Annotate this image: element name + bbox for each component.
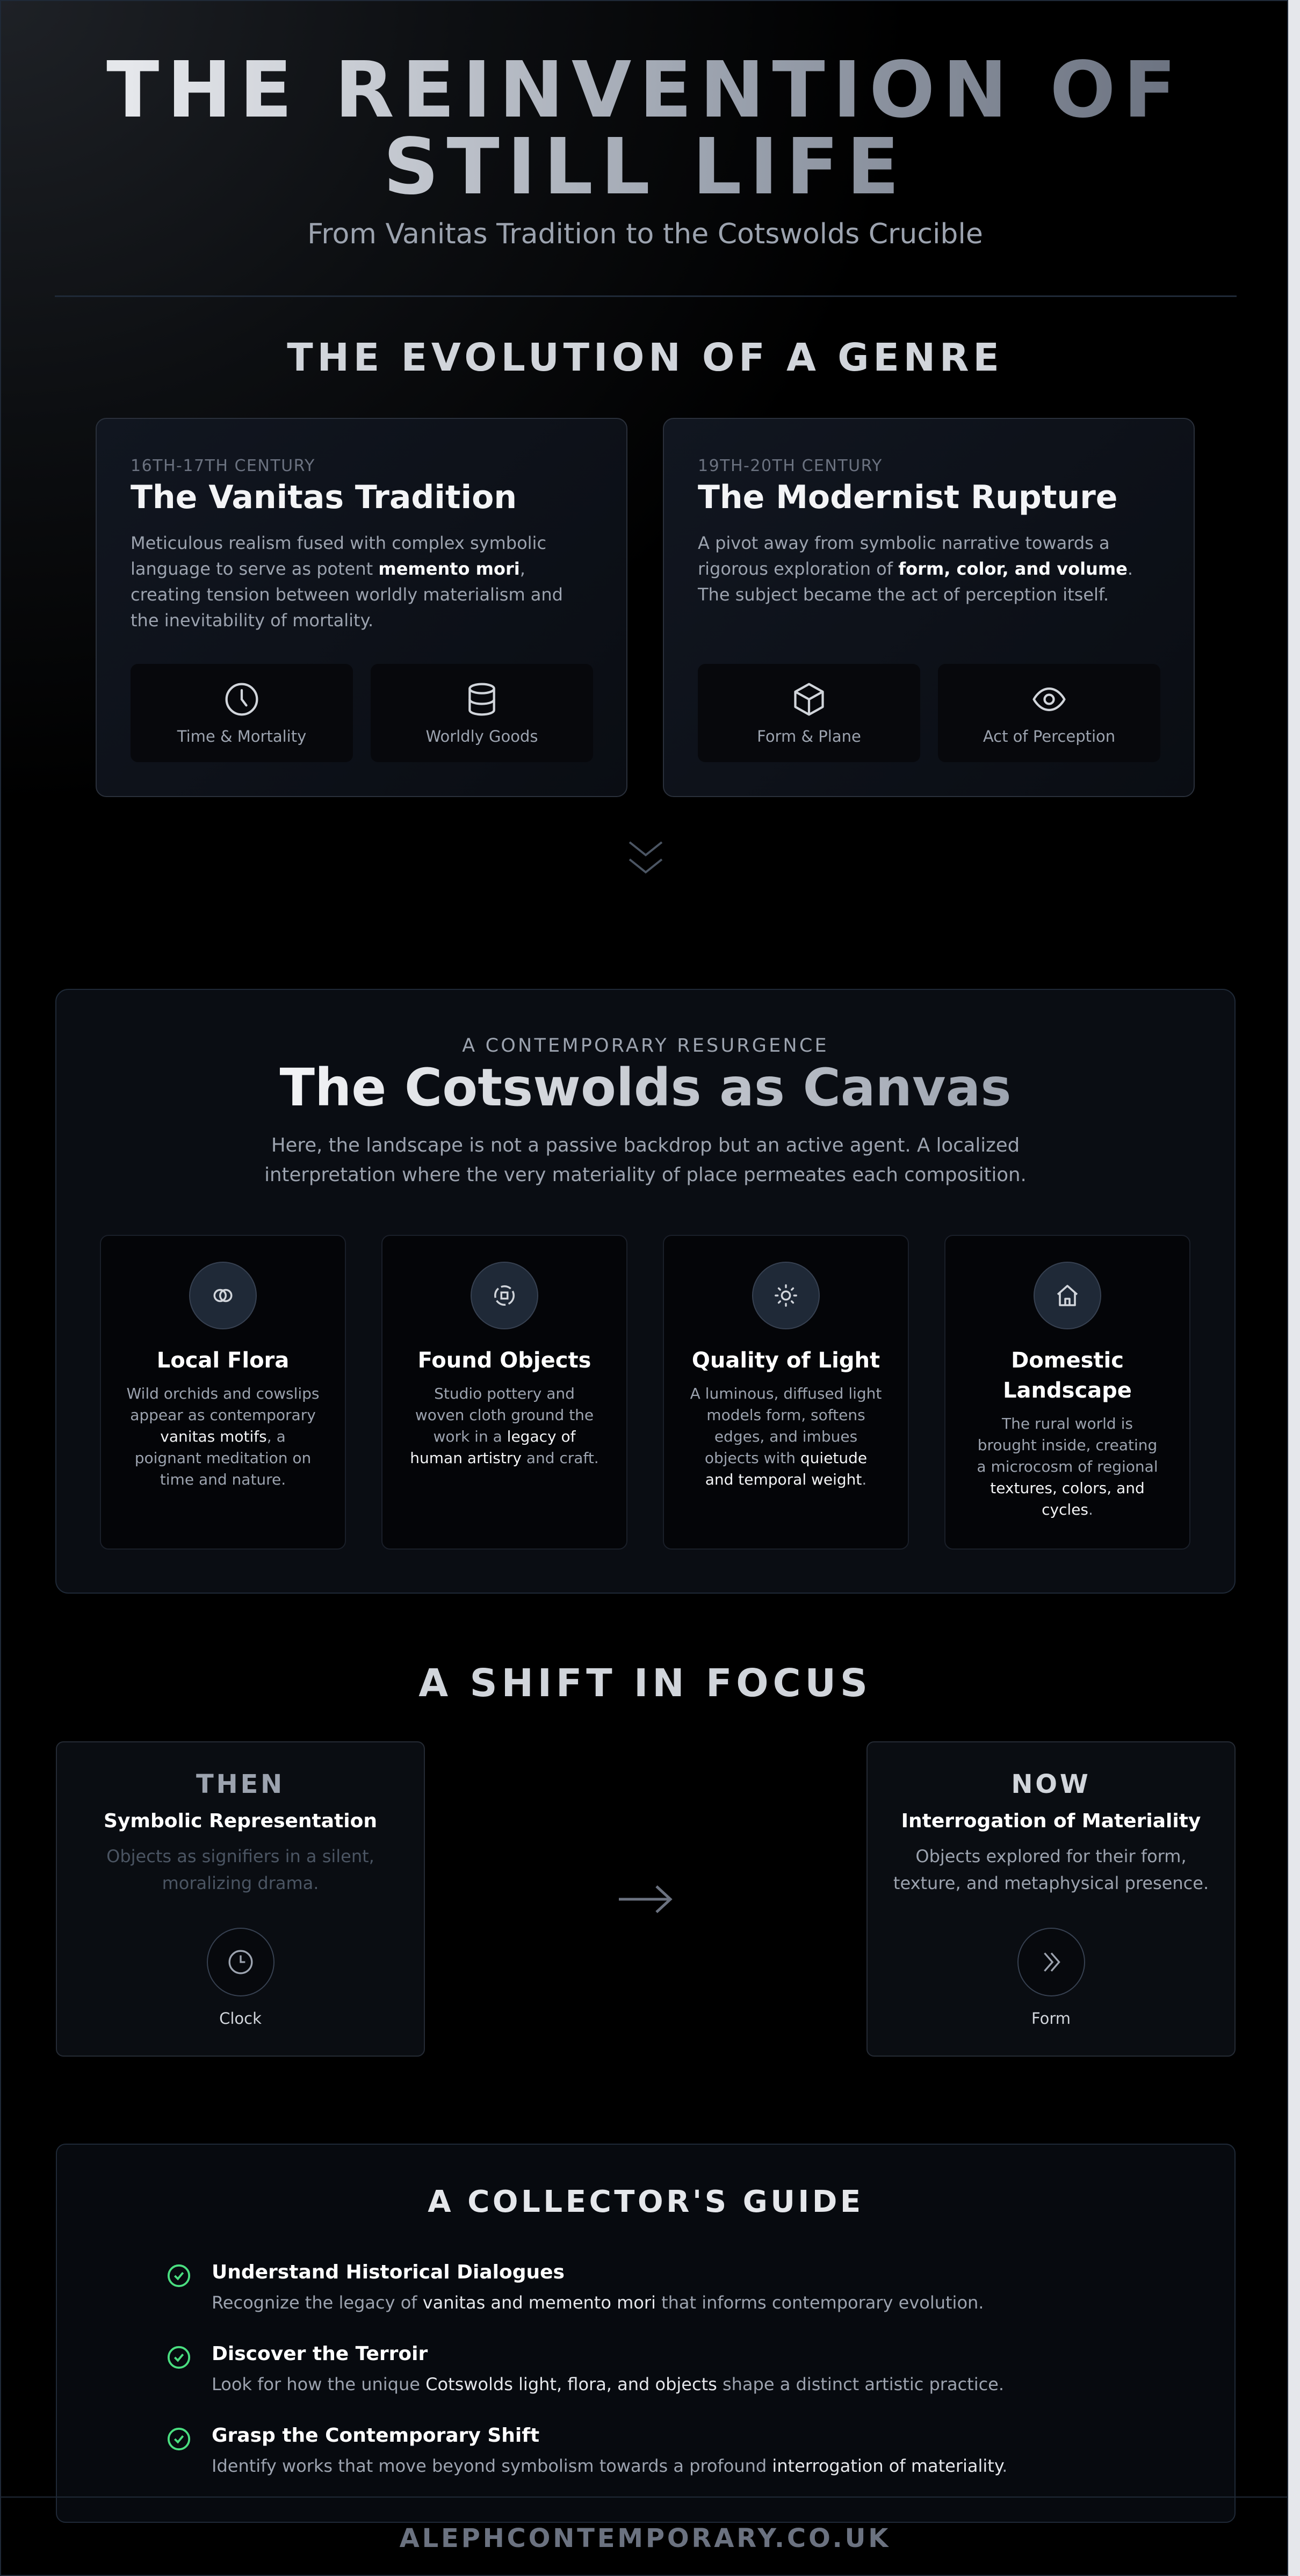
label: THEN <box>196 1769 285 1799</box>
description: language to serve as potent memento mori, <box>131 559 525 579</box>
icon: clock <box>206 1928 274 1996</box>
icon tiles <box>698 664 1160 762</box>
heading: A COLLECTOR'S GUIDE <box>428 2184 864 2219</box>
icon tiles <box>131 664 593 762</box>
tile: time & mortality: Time & Mortality <box>177 727 306 746</box>
card: local flora <box>100 1235 346 1550</box>
text: Studio pottery and <box>434 1385 575 1402</box>
item text: Identify works that move beyond symbolism towards a profound interrogation of materiality. <box>212 2456 1007 2476</box>
description: creating tension between worldly materialism and <box>131 584 563 605</box>
title: STILL LIFE <box>383 121 907 212</box>
description: A pivot away from symbolic narrative towards a <box>698 533 1110 553</box>
label: NOW <box>1011 1769 1091 1799</box>
icon: check <box>168 2428 190 2450</box>
text <box>893 1846 1209 1893</box>
text: cycles. <box>1042 1501 1093 1518</box>
title: Local Flora <box>157 1348 289 1373</box>
text <box>410 1385 599 1467</box>
subtitle: Interrogation of Materiality <box>901 1810 1201 1832</box>
text: edges, and imbues <box>714 1428 857 1445</box>
text: Objects as signifiers in a silent, <box>106 1846 374 1866</box>
text: moralizing drama. <box>162 1873 319 1893</box>
tile: form & plane <box>698 664 920 762</box>
title: Domestic <box>1011 1348 1124 1373</box>
text: textures, colors, and <box>990 1479 1145 1497</box>
guide item 1 <box>168 2261 984 2313</box>
icon: flora <box>189 1262 257 1329</box>
text: objects with quietude <box>705 1449 867 1467</box>
panel: collector's guide <box>56 2144 1236 2523</box>
text: brought inside, creating <box>978 1436 1157 1454</box>
description: the inevitability of mortality. <box>131 610 373 631</box>
intro text: Here, the landscape is not a passive backdrop but an active agent. A localized <box>271 1134 1020 1156</box>
icon: down chevrons <box>629 841 663 873</box>
description: The subject became the act of perception itself. <box>698 584 1109 605</box>
heading: shift in focus: A SHIFT IN FOCUS <box>418 1661 872 1705</box>
title <box>1003 1348 1132 1403</box>
panel: modernist rupture <box>663 418 1195 797</box>
title: Quality of Light <box>692 1348 880 1373</box>
footer: ALEPHCONTEMPORARY.CO.UK <box>400 2523 891 2553</box>
tile: form & plane: Form & Plane <box>757 727 861 746</box>
card: domestic landscape <box>944 1235 1190 1550</box>
intro text <box>264 1134 1027 1186</box>
text <box>977 1415 1158 1518</box>
text: vanitas motifs, a <box>160 1428 286 1445</box>
card title: The Vanitas Tradition <box>131 479 517 516</box>
text: texture, and metaphysical presence. <box>893 1873 1209 1893</box>
item text: Recognize the legacy of vanitas and memento mori that informs contemporary evolution. <box>212 2292 984 2313</box>
tile: act of perception: Act of Perception <box>983 727 1115 746</box>
icon: home <box>1034 1262 1101 1329</box>
tile: worldly goods <box>371 664 593 762</box>
item title: Discover the Terroir <box>212 2343 428 2365</box>
text: a microcosm of regional <box>977 1458 1158 1475</box>
icon label: Clock <box>219 2009 262 2028</box>
text <box>126 1385 320 1488</box>
item text: Look for how the unique Cotswolds light, flora, and objects shape a distinct artistic practice. <box>212 2374 1004 2394</box>
text: work in a legacy of <box>434 1428 575 1445</box>
card: quality of light <box>663 1235 909 1550</box>
description: Meticulous realism fused with complex symbolic <box>131 533 546 553</box>
heading: The Cotswolds as Canvas <box>279 1058 1012 1118</box>
text: The rural world is <box>1002 1415 1133 1432</box>
text <box>690 1385 882 1488</box>
description <box>131 533 563 631</box>
text <box>106 1846 374 1893</box>
text: Wild orchids and cowslips <box>126 1385 320 1402</box>
intro text: interpretation where the very materiality of place permeates each composition. <box>264 1164 1027 1186</box>
subtitle: Symbolic Representation <box>104 1810 377 1832</box>
icon label: Form <box>1031 2009 1071 2028</box>
icon: check <box>168 2264 190 2287</box>
description <box>697 533 1133 605</box>
heading: evolution: THE EVOLUTION OF A GENRE <box>287 335 1003 380</box>
icon: sun <box>752 1262 820 1329</box>
icon: form <box>1017 1928 1085 1996</box>
guide item 2 <box>168 2343 1004 2394</box>
panel: then <box>56 1741 425 2057</box>
description: rigorous exploration of form, color, and volume. <box>698 559 1133 579</box>
icon: check <box>168 2346 190 2369</box>
title: THE REINVENTION OF <box>106 45 1184 135</box>
arrow <box>619 1885 673 1913</box>
text: poignant meditation on <box>135 1449 311 1467</box>
panel: cotswolds as canvas <box>55 989 1236 1594</box>
icon: found objects <box>471 1262 538 1329</box>
card title: The Modernist Rupture <box>698 479 1117 516</box>
tile: worldly goods: Worldly Goods <box>425 727 538 746</box>
text: Objects explored for their form, <box>915 1846 1187 1866</box>
title: Landscape <box>1003 1378 1132 1403</box>
subtitle: From Vanitas Tradition to the Cotswolds Crucible <box>307 218 983 250</box>
text: woven cloth ground the <box>415 1406 594 1424</box>
title: Found Objects <box>418 1348 591 1373</box>
item title: Grasp the Contemporary Shift <box>212 2425 539 2447</box>
guide item 3 <box>168 2425 1007 2476</box>
panel: vanitas tradition <box>96 418 627 797</box>
tile: act of perception <box>938 664 1160 762</box>
panel: now <box>866 1741 1236 2057</box>
era label: 16TH-17TH CENTURY <box>131 457 315 475</box>
text: appear as contemporary <box>130 1406 316 1424</box>
item title: Understand Historical Dialogues <box>212 2261 565 2283</box>
text: time and nature. <box>160 1471 286 1488</box>
kicker: A CONTEMPORARY RESURGENCE <box>462 1035 829 1057</box>
text: models form, softens <box>706 1406 865 1424</box>
era label: 19TH-20TH CENTURY <box>698 457 883 475</box>
text: and temporal weight. <box>705 1471 866 1488</box>
text: A luminous, diffused light <box>690 1385 882 1402</box>
card: found objects <box>381 1235 627 1550</box>
title <box>1 52 1289 205</box>
tile: time & mortality <box>131 664 353 762</box>
text: human artistry and craft. <box>410 1449 599 1467</box>
